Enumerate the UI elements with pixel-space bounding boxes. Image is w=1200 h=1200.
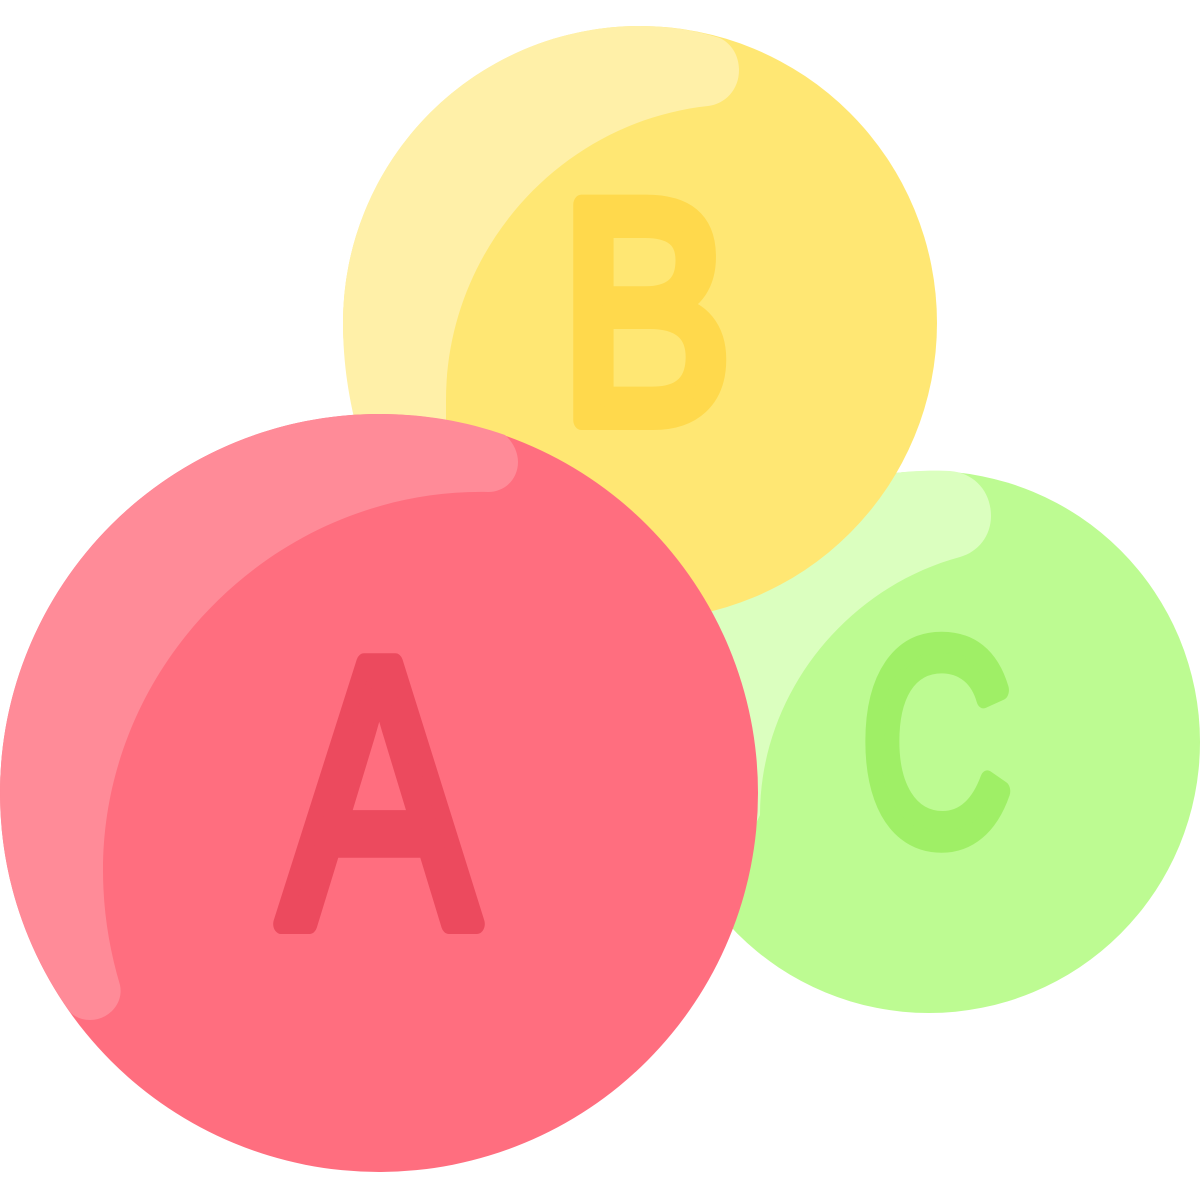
circle A highlight [0,414,518,1020]
letter B: B [560,137,732,487]
circle B body [343,26,937,620]
circle C highlight [640,471,991,900]
circle B highlight [343,26,739,440]
circle A body [0,414,758,1172]
letter C: C [862,582,1011,901]
circle C body [658,471,1200,1013]
letter A: A [280,582,479,1005]
circle A group [0,414,758,1172]
circle B group [343,26,937,620]
circle C group [640,471,1200,1013]
